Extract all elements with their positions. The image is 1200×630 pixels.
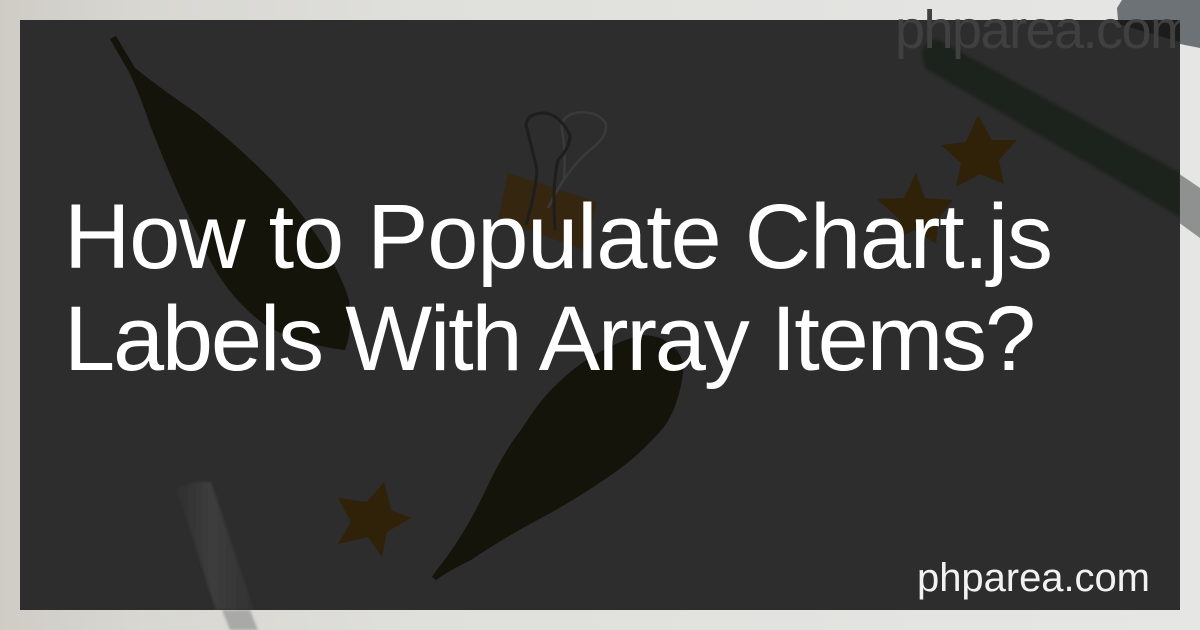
site label: phparea.com	[917, 556, 1150, 600]
star middle right	[877, 173, 953, 244]
pen bottom left outside panel	[222, 610, 258, 630]
title line 1: How to Populate Chart.js	[64, 186, 1053, 288]
leaf bottom center	[432, 335, 684, 580]
leaf top left	[110, 36, 350, 350]
clip wire back	[548, 112, 606, 208]
title line 2: Labels With Array Items?	[64, 288, 1036, 390]
title	[64, 186, 1053, 390]
pen top right inside panel	[1117, 20, 1180, 42]
binder clip	[498, 112, 606, 250]
clip wire front	[526, 113, 570, 230]
star top right	[941, 115, 1017, 187]
pen bottom left	[190, 482, 246, 610]
clip body	[498, 173, 597, 250]
pen right outside panel	[1178, 173, 1200, 238]
watermark inside panel: phparea.com	[895, 0, 1195, 60]
pen top right outside panel	[1117, 0, 1200, 48]
dark pen upper right	[922, 39, 1180, 217]
watermark portion above panel: phparea.com	[895, 0, 1195, 60]
star bottom	[338, 482, 411, 557]
